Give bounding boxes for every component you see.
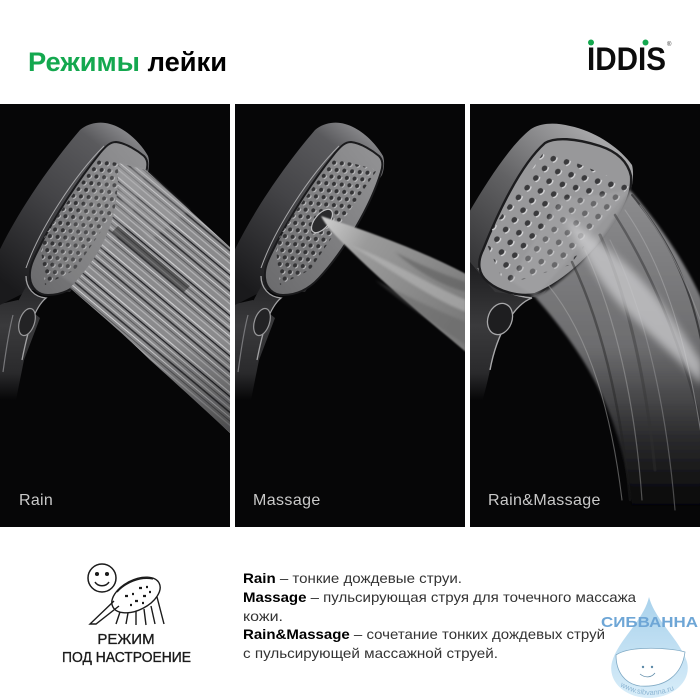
water: massage jet xyxy=(321,216,466,352)
line: Rain&Massage: Rain&Massage – сочетание тонких дождевых струй xyxy=(243,626,605,642)
shower head: rain xyxy=(0,123,149,400)
shower head: massage xyxy=(229,123,384,400)
line: Massage continued: кожи. xyxy=(243,608,283,624)
line: Rain: Rain – тонкие дождевые струи. xyxy=(243,570,462,586)
line: Rain&Massage continued: с пульсирующей массажной струей. xyxy=(243,645,498,661)
label: Rain&Massage: Rain&Massage xyxy=(488,492,601,509)
panel: Massage xyxy=(229,104,466,527)
watermark: Sibvanna xyxy=(601,597,698,698)
label: Massage: Massage xyxy=(253,492,321,509)
panel: Rain&Massage xyxy=(468,104,700,527)
title: Режимы лейки xyxy=(28,47,227,77)
icon: mood shower xyxy=(88,564,166,625)
watermark: Sibvanna: СИБВАННА xyxy=(601,614,698,631)
line: Massage: Massage – пульсирующая струя для точечного массажа xyxy=(243,589,636,605)
water: rain and massage streams xyxy=(510,190,700,510)
description text xyxy=(243,570,636,661)
water: rain streams xyxy=(50,163,232,435)
logo: IDDIS: ® xyxy=(667,41,672,48)
central nozzle xyxy=(310,208,333,234)
panel: Rain xyxy=(0,104,232,527)
label: Rain: Rain xyxy=(19,492,53,509)
icon caption second line: ПОД НАСТРОЕНИЕ xyxy=(62,649,191,666)
logo: IDDIS: IDDIS xyxy=(587,41,666,77)
shower head: rain and massage xyxy=(468,124,633,402)
icon: smiley xyxy=(88,564,116,592)
watermark: Sibvanna: www.sibvanna.ru xyxy=(621,682,674,695)
icon caption: РЕЖИМ xyxy=(97,631,155,648)
icon: shower head xyxy=(90,570,166,625)
